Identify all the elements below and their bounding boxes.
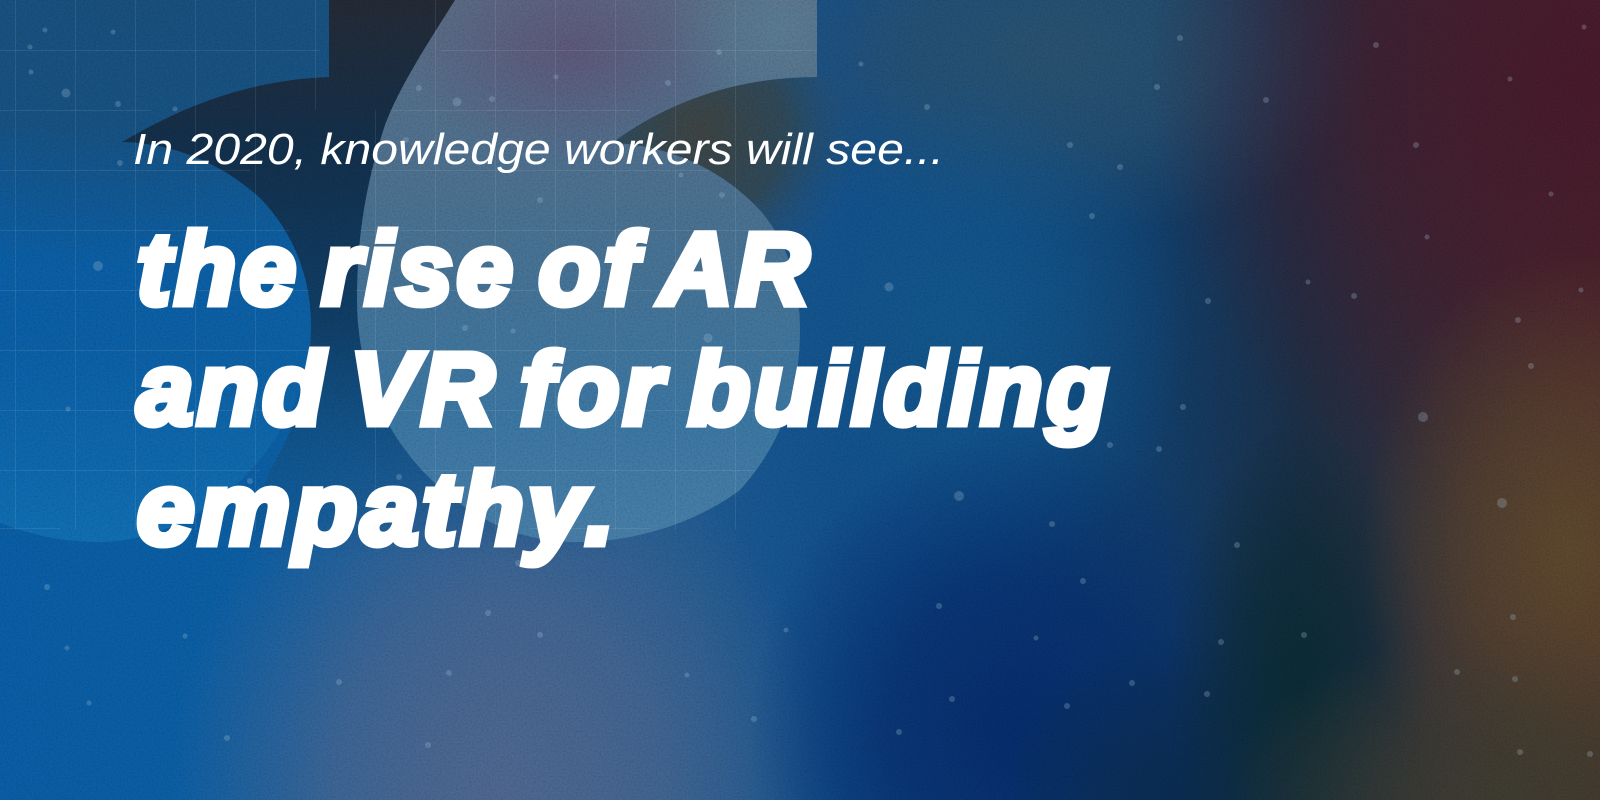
subtitle: In 2020, knowledge workers will see... xyxy=(133,125,944,174)
headline: and VR for building xyxy=(137,332,1112,446)
grid lines xyxy=(0,0,817,530)
quote mark: left dark wedge xyxy=(122,0,640,590)
headline: the rise of AR xyxy=(137,212,813,326)
quote mark: left light circle xyxy=(0,142,311,542)
headline: empathy. xyxy=(137,452,618,566)
quote mark: right light shape xyxy=(357,0,817,542)
headline xyxy=(137,212,1112,566)
quote mark: right dark wedge xyxy=(612,77,875,345)
